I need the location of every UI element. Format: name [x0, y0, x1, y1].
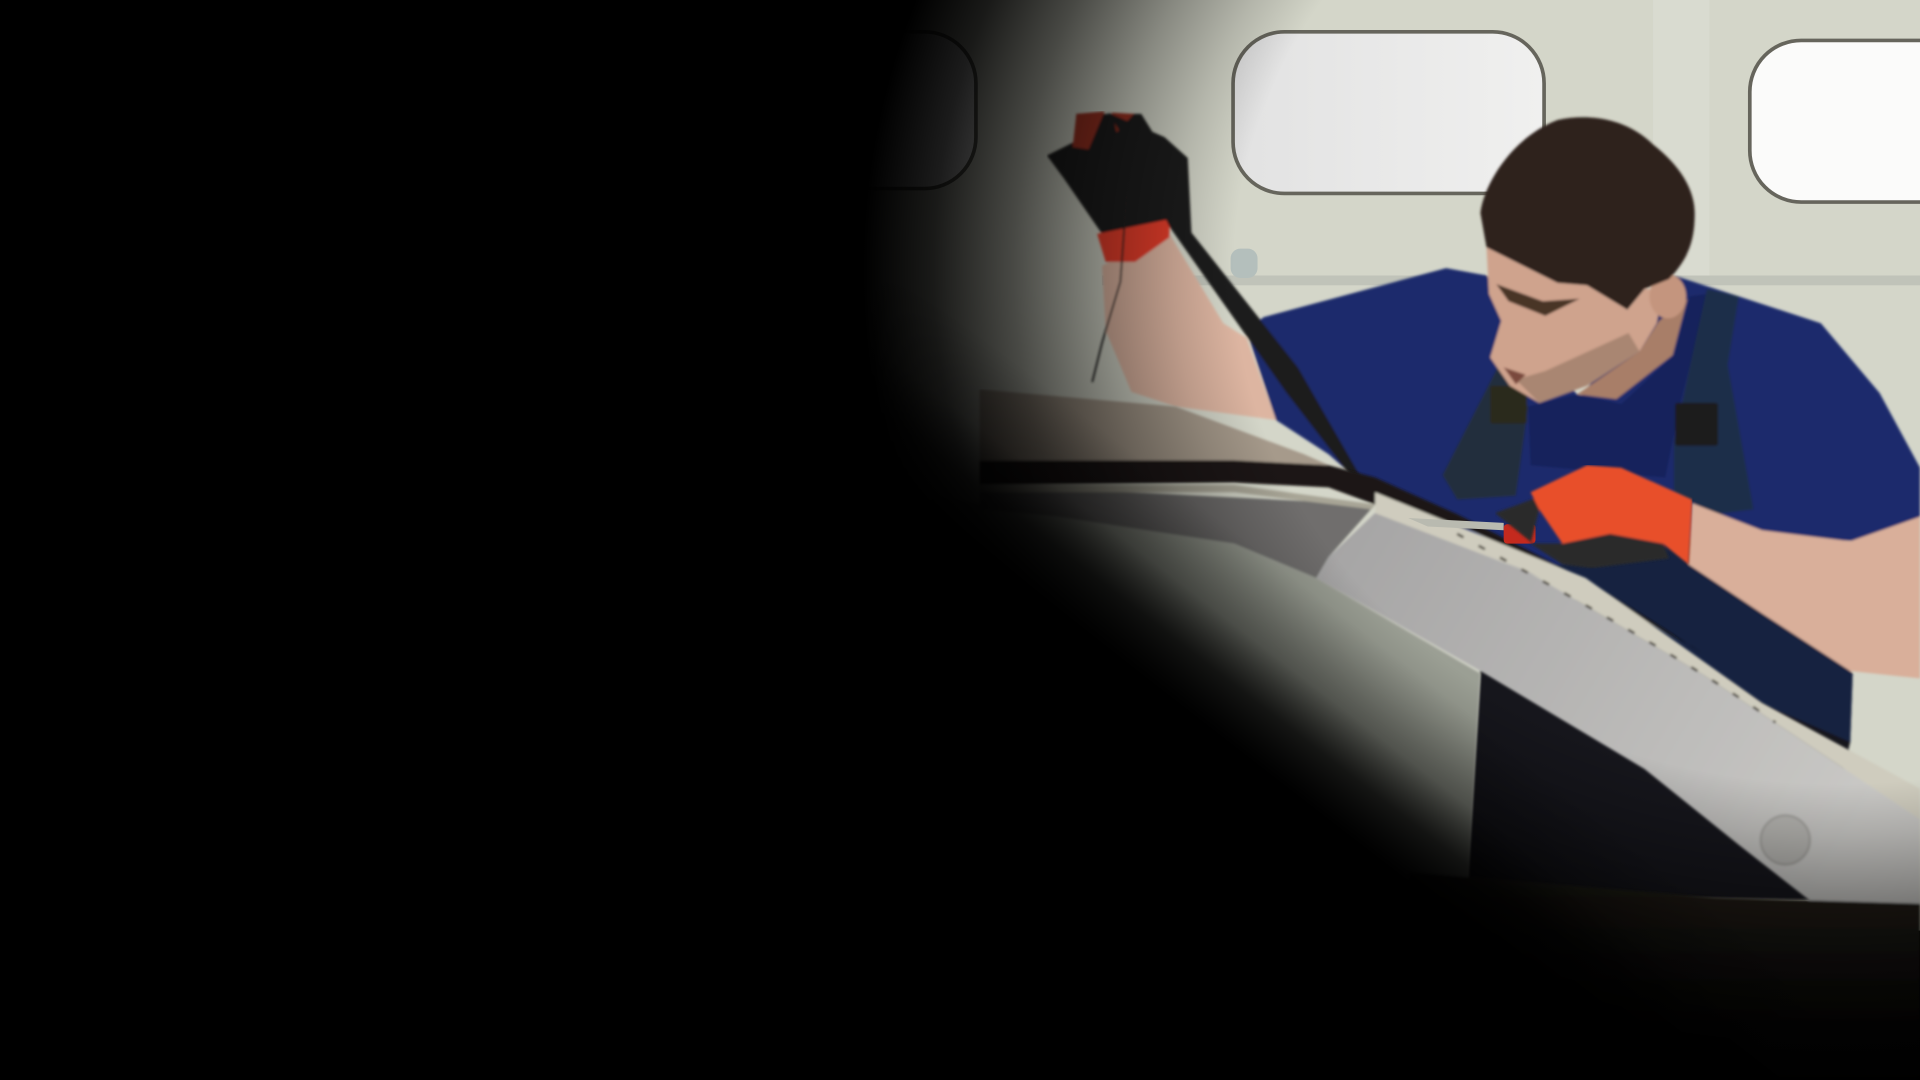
shirt collar shading — [1528, 294, 1708, 478]
strap buckle left — [1490, 386, 1527, 424]
trim highlight — [980, 485, 1375, 509]
rubber strip — [1108, 113, 1375, 502]
dark palm — [1495, 486, 1669, 568]
face — [1487, 247, 1663, 403]
mouth — [1504, 367, 1526, 384]
red glove cuff — [1097, 219, 1169, 262]
dark rubber channel — [980, 460, 1703, 654]
white seal — [1375, 492, 1920, 819]
right strap — [1674, 289, 1753, 514]
working arm — [1689, 503, 1920, 678]
pillar clip — [1761, 816, 1810, 864]
overall bib — [1531, 539, 1853, 742]
loose thread — [1092, 196, 1127, 382]
eyebrow and eye — [1496, 284, 1580, 316]
garage wall — [686, 0, 1920, 931]
red glove fingers — [1073, 111, 1134, 149]
upper interior trim — [980, 485, 1375, 578]
windshield glass — [931, 496, 1480, 896]
raised arm — [1102, 234, 1276, 420]
hair — [1480, 117, 1695, 310]
seal residue — [1457, 534, 1776, 722]
stubble — [1516, 333, 1640, 403]
left strap — [1442, 365, 1528, 500]
orange glove — [1531, 465, 1692, 564]
roof — [980, 389, 1335, 468]
technician — [1047, 111, 1920, 900]
A-pillar trim — [1316, 513, 1920, 904]
shirt — [1247, 268, 1920, 588]
garage windows — [735, 32, 1920, 202]
scraper tool — [1408, 518, 1536, 544]
neck — [1577, 299, 1687, 399]
ear — [1649, 274, 1686, 318]
working hand glove — [1495, 465, 1692, 568]
car — [931, 389, 1920, 1080]
strap buckle right — [1675, 403, 1718, 446]
lower overalls — [1467, 564, 1853, 900]
hood edge — [1408, 872, 1920, 1080]
raised hand glove — [1047, 114, 1173, 234]
